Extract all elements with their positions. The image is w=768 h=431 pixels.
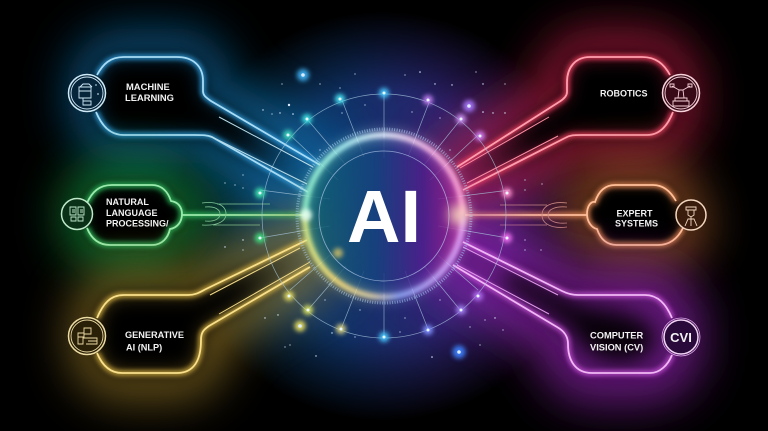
icon: cvi badge: CVI bbox=[670, 330, 692, 345]
label: machine learning: MACHINE bbox=[126, 81, 170, 92]
panel: machine learning bbox=[68, 57, 320, 192]
panel: computer vision bbox=[453, 242, 700, 373]
panel: generative ai bbox=[68, 240, 310, 373]
icon: machine learning bbox=[68, 74, 106, 112]
panel: computer vision: VISION (CV) bbox=[590, 342, 643, 352]
central ai hub bbox=[260, 93, 510, 339]
panel: generative ai: AI (NLP) bbox=[126, 342, 162, 352]
label: expert systems: EXPERT bbox=[616, 208, 653, 218]
panel: robotics bbox=[457, 57, 700, 190]
panel: expert systems: SYSTEMS bbox=[615, 218, 658, 228]
title: AI: AI bbox=[347, 175, 421, 258]
icon: cvi badge bbox=[662, 318, 700, 356]
hub flares bbox=[300, 205, 469, 258]
panel: expert systems bbox=[465, 185, 706, 245]
central nebula glow bbox=[193, 18, 577, 414]
nodes on dial bbox=[255, 88, 512, 342]
icon: expert systems bbox=[676, 200, 706, 230]
panel: natural language processing bbox=[62, 185, 305, 245]
icon: generative ai bbox=[68, 318, 106, 354]
label: natural language processing: NATURAL bbox=[106, 197, 149, 207]
icon: robotics bbox=[662, 74, 700, 112]
panel: natural language processing: PROCESSING/ bbox=[106, 218, 169, 228]
glowing ring bbox=[305, 135, 463, 297]
connector arcs: expert systems bbox=[500, 203, 567, 227]
outer dial ring with spokes bbox=[260, 93, 510, 339]
label: computer vision: COMPUTER bbox=[590, 330, 643, 340]
panel: machine learning: LEARNING bbox=[125, 92, 174, 103]
label: generative ai: GENERATIVE bbox=[125, 330, 184, 340]
central disc bbox=[306, 138, 462, 294]
dotted ring bbox=[297, 129, 471, 303]
connector arcs: natural language processing bbox=[202, 202, 270, 225]
star field bbox=[224, 69, 543, 358]
panel: natural language processing: LANGUAGE bbox=[106, 208, 158, 218]
label: robotics: ROBOTICS bbox=[600, 88, 648, 98]
icon: natural language processing bbox=[62, 198, 92, 230]
